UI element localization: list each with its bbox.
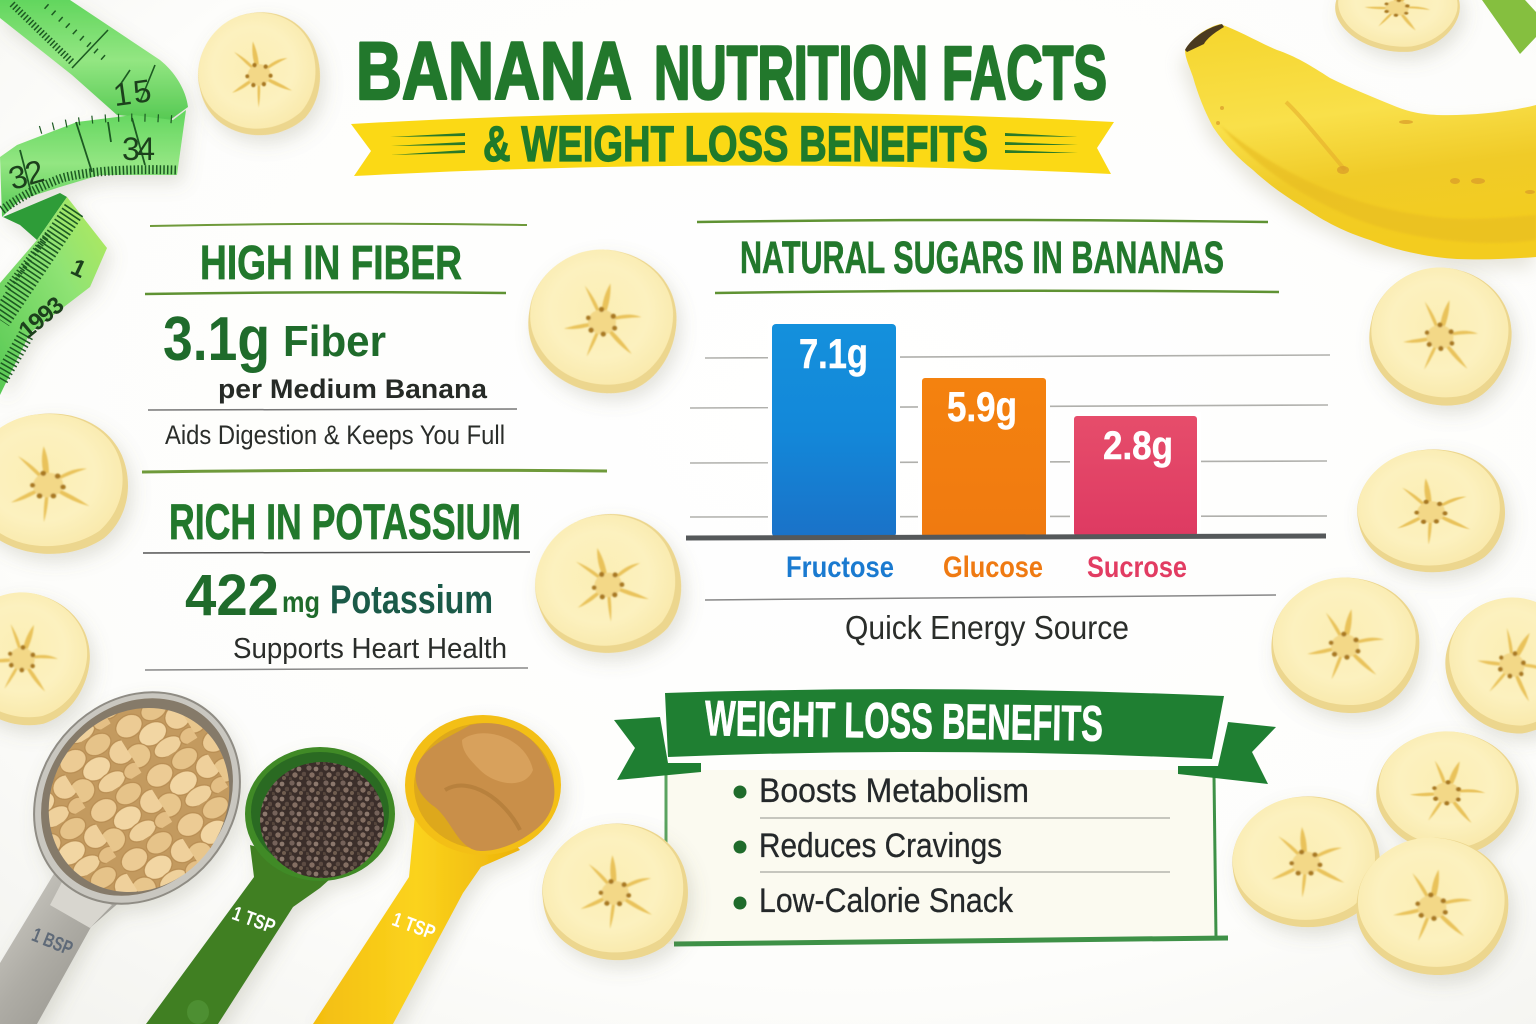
stat: 422mg potassium: 422	[185, 563, 279, 628]
stat: 422mg potassium: Potassium	[330, 578, 493, 622]
icon: measuring tape: 15	[111, 72, 153, 113]
icon: measuring tape: 32	[5, 153, 48, 197]
icon: green leaf strip	[1482, 0, 1536, 54]
icon: measuring tape: 1	[67, 254, 90, 284]
subtitle ribbon: & WEIGHT LOSS BENEFITS	[483, 116, 988, 172]
banana slices: bottom cluster	[533, 718, 1534, 980]
icon: measuring tape: 1993	[14, 292, 69, 344]
heading: natural sugars: NATURAL SUGARS IN BANANAS	[740, 232, 1224, 283]
bar: glucose	[918, 374, 1050, 537]
title: NUTRITION FACTS	[654, 31, 1107, 116]
axis labels: Sucrose	[1087, 551, 1187, 584]
ribbon	[665, 689, 1224, 759]
bullet: reduces cravings: Reduces Cravings	[759, 827, 1002, 865]
bar: sucrose	[1070, 412, 1201, 536]
icon: measuring tape	[0, 0, 188, 395]
axis labels: Glucose	[943, 551, 1043, 584]
bullet: boosts metabolism: Boosts Metabolism	[759, 772, 1029, 810]
caption: quick energy source: Quick Energy Source	[845, 609, 1129, 646]
title	[356, 26, 1107, 117]
bar: glucose: 5.9g	[947, 383, 1017, 430]
panel: weight loss benefits	[614, 689, 1276, 944]
icon: green spoon with chia seeds: 1 TSP	[229, 903, 278, 938]
heading: rich in potassium: RICH IN POTASSIUM	[169, 494, 521, 550]
heading: weight loss benefits: WEIGHT LOSS BENEFITS	[705, 690, 1103, 752]
ribbon tail right	[1178, 722, 1276, 784]
stat: 422mg potassium	[185, 563, 493, 628]
banana slices: top row	[185, 0, 1476, 402]
panel: natural sugars chart	[686, 220, 1330, 646]
icon: whole banana	[1182, 24, 1536, 269]
bar: fructose	[768, 320, 900, 537]
stat: 3.1g fiber: Fiber	[283, 317, 386, 366]
stat: 3.1g fiber	[163, 305, 386, 374]
panel: rich in potassium	[143, 494, 530, 670]
text: per medium banana: per Medium Banana	[218, 374, 488, 404]
heading: high in fiber: HIGH IN FIBER	[200, 237, 462, 290]
stat: 3.1g fiber: 3.1g	[163, 305, 270, 374]
icon: yellow spoon with peanut butter: 1 TSP	[389, 909, 438, 944]
panel: high in fiber	[145, 224, 527, 450]
bar: sucrose: 2.8g	[1103, 424, 1173, 468]
icon: green spoon with chia seeds	[146, 747, 395, 1024]
title: BANANA	[356, 26, 632, 117]
text: aids digestion: Aids Digestion & Keeps You Full	[165, 420, 505, 450]
banana slices: left side	[0, 402, 701, 739]
bullet: low-calorie snack: Low-Calorie Snack	[759, 882, 1014, 920]
icon: silver spoon with oats	[0, 650, 283, 1024]
icon: silver spoon with oats: 1 BSP	[29, 924, 76, 960]
icon: yellow spoon with peanut butter	[313, 715, 561, 1024]
text: supports heart health: Supports Heart Health	[233, 633, 507, 665]
icon: measuring tape: 34	[122, 131, 155, 167]
bar: fructose: 7.1g	[799, 330, 868, 377]
ribbon tail left	[614, 717, 701, 780]
axis labels	[786, 551, 1187, 584]
stat: 422mg potassium: mg	[282, 586, 320, 619]
axis labels: Fructose	[786, 551, 894, 584]
banana slices: right side	[1266, 257, 1536, 753]
